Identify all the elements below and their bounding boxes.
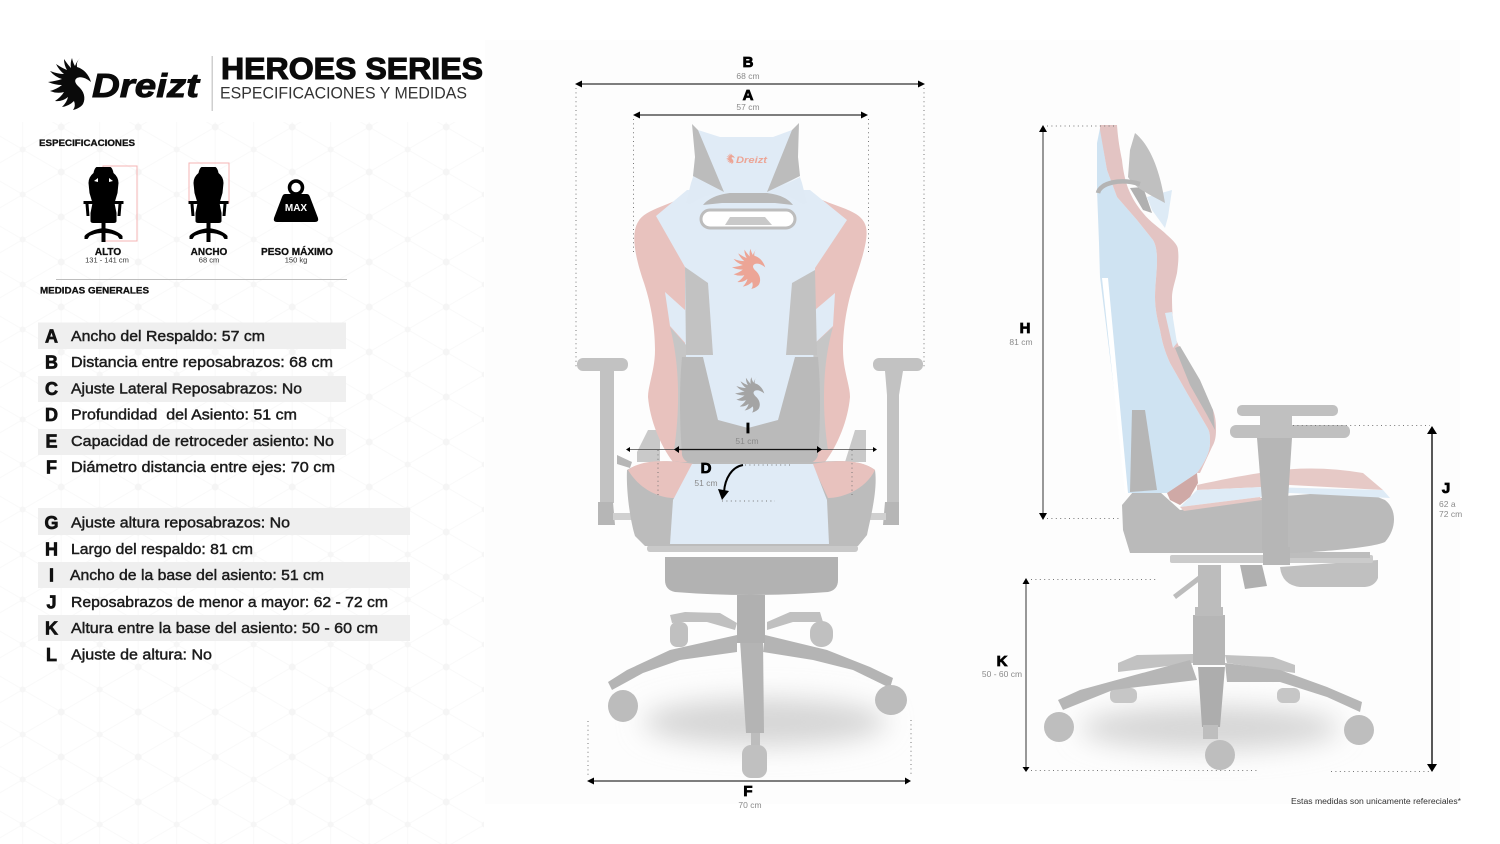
footrest — [1280, 560, 1378, 587]
list: medidas G-L: I — [49, 566, 54, 586]
footnote: Estas medidas son unicamente refereciales* — [1291, 797, 1461, 806]
spec: ancho: 68 cm — [199, 256, 219, 264]
title — [220, 51, 483, 102]
list: medidas A-F: Ajuste Lateral Reposabrazos: No — [71, 380, 302, 398]
floor shadow — [643, 698, 887, 746]
heading: especificaciones: ESPECIFICACIONES — [39, 138, 135, 149]
left armrest — [577, 358, 633, 525]
brand logo: Dreizt — [92, 67, 201, 104]
spec: peso maximo: MAX — [285, 203, 307, 214]
rim blue inset — [1165, 312, 1177, 348]
back grey panels — [685, 267, 713, 355]
dimension J: 72 cm — [1439, 509, 1462, 519]
dimension J: J — [1442, 480, 1450, 497]
headrest — [1147, 190, 1172, 228]
dimension B — [575, 54, 925, 367]
background hex pattern — [0, 122, 484, 844]
handle — [703, 192, 793, 205]
list: medidas G-L: Ajuste de altura: No — [71, 646, 212, 664]
white stripe — [1102, 278, 1128, 493]
footrest — [665, 557, 838, 595]
section divider — [56, 279, 347, 280]
dimension H — [1009, 125, 1120, 520]
dimension F — [587, 720, 911, 810]
list: medidas A-F: Distancia entre reposabrazos: 68 cm — [71, 354, 333, 371]
spec: ancho — [188, 163, 229, 264]
list: medidas G-L: K — [45, 618, 58, 638]
backrest blue — [1097, 128, 1210, 493]
header divider — [212, 56, 213, 111]
floor shadow — [1080, 706, 1340, 750]
list: medidas G-L: J — [46, 592, 57, 612]
dimension H: 81 cm — [1009, 337, 1033, 347]
list: medidas G-L: Reposabrazos de menor a mayor: 62 - 72 cm — [71, 594, 388, 611]
dimension I: I — [746, 420, 750, 437]
list: medidas A-F: F — [46, 458, 57, 478]
backrest centre — [656, 190, 847, 360]
side view chair — [1044, 125, 1394, 770]
chair stage panel — [485, 40, 1460, 804]
list: medidas G-L: H — [45, 540, 58, 560]
brand logo — [48, 58, 201, 110]
list: medidas A-F: D — [45, 405, 58, 425]
star base — [1058, 654, 1362, 727]
dimension F: 70 cm — [738, 800, 762, 810]
side slits — [665, 292, 687, 345]
spec: alto — [84, 166, 137, 264]
chrome bar — [647, 545, 858, 552]
list: medidas A-F: E — [45, 432, 58, 452]
headrest logo — [726, 153, 735, 164]
front view chair — [577, 123, 923, 778]
plate — [1170, 552, 1373, 563]
rim grey section — [1175, 346, 1215, 430]
list: medidas A-F: B — [45, 352, 58, 372]
list: medidas A-F: Profundidad del Asiento: 51 cm — [71, 406, 297, 424]
seat centre — [670, 464, 829, 544]
side mechanisms — [637, 430, 866, 462]
spec: ancho: ANCHO — [191, 247, 228, 258]
title: ESPECIFICACIONES Y MEDIDAS — [220, 84, 467, 102]
spec: peso maximo: 150 kg — [285, 256, 307, 264]
headrest — [693, 130, 800, 193]
seat base — [1122, 490, 1394, 553]
dimension I: 51 cm — [735, 436, 759, 446]
dimension I — [626, 420, 877, 497]
backrest shell — [634, 193, 867, 462]
dimension A: 57 cm — [736, 102, 760, 112]
list: medidas G-L: Ancho de la base del asiento: 51 cm — [70, 567, 324, 584]
list: medidas A-F: Ancho del Respaldo: 57 cm — [71, 328, 265, 345]
title: HEROES SERIES — [221, 51, 483, 86]
list: medidas G-L: Ajuste altura reposabrazos: No — [71, 514, 290, 532]
dimension J — [1293, 426, 1462, 772]
seat pink cushions — [628, 461, 694, 498]
dimension A: A — [743, 87, 754, 104]
rear casters — [1110, 688, 1300, 703]
front base arms and casters — [608, 595, 907, 778]
rear base arms and casters — [670, 612, 833, 647]
front view chair: Dreizt — [736, 155, 768, 165]
dimension B: B — [743, 54, 754, 71]
list: medidas G-L: Altura entre la base del asiento: 50 - 60 cm — [71, 620, 378, 637]
arm rests — [1230, 405, 1350, 565]
dimension H: H — [1020, 320, 1030, 337]
dimension D: D — [701, 460, 712, 477]
list: medidas G-L: G — [44, 513, 59, 533]
list: medidas A-F: Diámetro distancia entre ejes: 70 cm — [71, 459, 335, 476]
spec: alto: ALTO — [95, 247, 121, 258]
back logo — [732, 249, 765, 289]
list: medidas A-F: Capacidad de retroceder asiento: No — [71, 433, 334, 450]
list: medidas A-F: A — [45, 326, 58, 346]
casters — [1044, 712, 1374, 770]
dimension K: K — [997, 653, 1008, 670]
list: medidas A-F: C — [45, 379, 58, 399]
list: medidas G-L: L — [46, 645, 57, 665]
list: medidas G-L — [38, 508, 410, 665]
seat base — [627, 461, 876, 546]
column and lever — [1173, 565, 1267, 665]
dimension F: F — [743, 783, 753, 800]
dimension K — [982, 578, 1258, 772]
backrest pink rim — [1100, 125, 1216, 473]
spec: alto: 131 - 141 cm — [85, 256, 129, 264]
lumbar pillow — [680, 357, 820, 464]
dimension K: 50 - 60 cm — [982, 669, 1022, 679]
dimension D — [694, 460, 790, 501]
heading: medidas generales: MEDIDAS GENERALES — [40, 286, 149, 296]
right armrest — [868, 358, 923, 525]
dimension A — [633, 87, 868, 255]
rim lower — [1167, 473, 1198, 505]
spec: peso maximo — [261, 181, 333, 264]
spec: peso maximo: PESO MÁXIMO — [261, 245, 333, 258]
list: medidas A-F — [38, 322, 346, 478]
dimension B: 68 cm — [736, 71, 760, 81]
seat top — [1197, 468, 1383, 490]
dimension J: 62 a — [1439, 499, 1456, 509]
list: medidas G-L: Largo del respaldo: 81 cm — [71, 541, 253, 558]
side bracket — [1130, 410, 1157, 492]
lumbar logo — [735, 377, 764, 413]
dimension D: 51 cm — [694, 478, 718, 488]
